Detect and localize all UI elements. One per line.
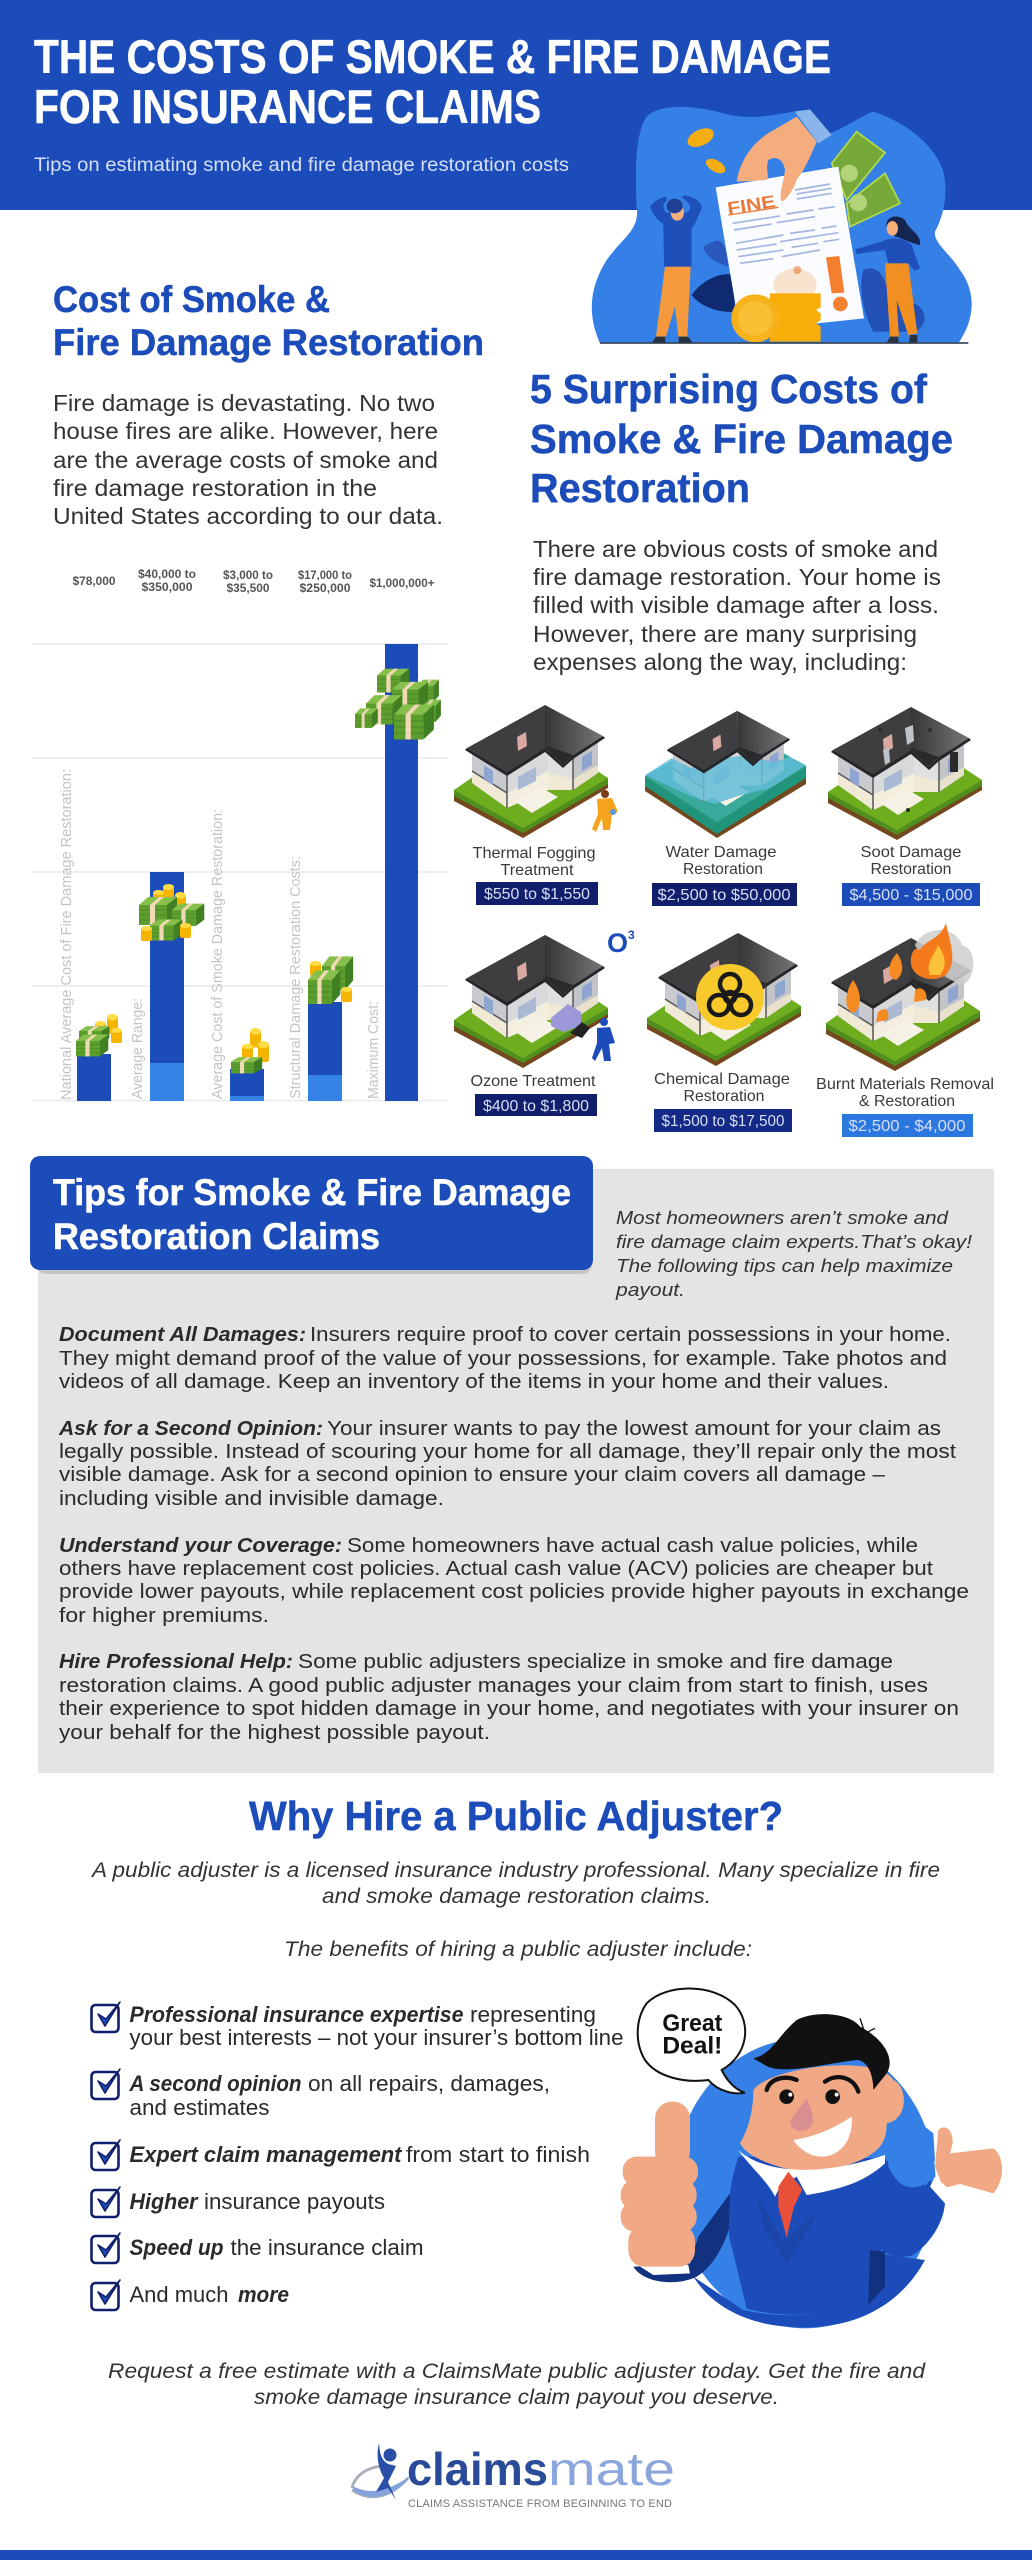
title: THE COSTS OF SMOKE & FIRE DAMAGE xyxy=(34,30,831,83)
label: & Restoration xyxy=(859,1093,955,1110)
icon: O3: O xyxy=(607,928,628,958)
benefit: higher payouts: Higher xyxy=(130,2189,199,2214)
card: chemical damage xyxy=(647,933,801,1132)
benefit: second opinion: A second opinion xyxy=(129,2071,302,2096)
tip: second opinion: including visible and invisible damage. xyxy=(59,1487,444,1510)
value labels: $1,000,000+ xyxy=(370,576,434,590)
intro paragraph: cost section xyxy=(53,390,443,529)
heading: cost of smoke and fire damage restoration xyxy=(53,279,484,363)
tip: second opinion: Your insurer wants to pay the lowest amount for your claim as xyxy=(327,1417,941,1440)
tip: hire professional help: Hire Professional Help: xyxy=(59,1650,293,1673)
rotated axis labels: Structural Damage Restoration Costs: xyxy=(287,856,304,1099)
panel heading: tips: Restoration Claims xyxy=(53,1216,380,1257)
label xyxy=(472,845,596,879)
subtitle: Tips on estimating smoke and fire damage restoration costs xyxy=(34,155,569,176)
card: soot damage xyxy=(828,707,982,906)
label: Thermal Fogging xyxy=(472,845,596,862)
benefit: speed up: Speed up xyxy=(130,2235,224,2260)
illustration: businessman thumbs up xyxy=(621,1989,1002,2328)
benefit: and much more: And much xyxy=(130,2282,228,2307)
label: Chemical Damage xyxy=(654,1071,790,1088)
intro paragraph: surprising costs: filled with visible damage after a loss. xyxy=(533,592,939,618)
tip: second opinion xyxy=(58,1417,956,1510)
money icon: bar 5 xyxy=(355,669,441,740)
speech bubble: Great xyxy=(662,2010,722,2037)
heading: 5 surprising costs: 5 Surprising Costs of xyxy=(530,366,927,412)
value labels: $350,000 xyxy=(142,580,193,594)
price tag: $2,500 to $50,000 xyxy=(658,887,791,904)
tip: second opinion: visible damage. Ask for a second opinion to ensure your claim covers all damage – xyxy=(59,1463,886,1486)
price tag: $550 to $1,550 xyxy=(484,886,590,903)
italic intro: tips: Most homeowners aren’t smoke and xyxy=(616,1207,949,1228)
rotated axis labels: Average Cost of Smoke Damage Restoration: xyxy=(209,809,226,1099)
price tag: $4,500 - $15,000 xyxy=(850,887,973,904)
label: Restoration xyxy=(683,861,763,878)
value labels: $40,000 to xyxy=(138,567,196,581)
intro paragraph: surprising costs: There are obvious costs of smoke and xyxy=(533,536,938,562)
tip: document all damages: videos of all damage. Keep an inventory of the items in your home and their values. xyxy=(59,1370,889,1393)
benefit: professional expertise xyxy=(92,2002,624,2050)
rotated axis labels: National Average Cost of Fire Damage Restoration: xyxy=(58,769,75,1100)
intro paragraph: cost section: Fire damage is devastating. No two xyxy=(53,390,435,416)
icon: flames xyxy=(846,923,952,1022)
icon: O3: 3 xyxy=(628,928,635,942)
speech bubble xyxy=(638,1989,745,2093)
tip: hire professional help: restoration claims. A good public adjuster manages your claim from start to finish, uses xyxy=(59,1674,928,1697)
tip: hire professional help xyxy=(59,1650,959,1744)
benefit: second opinion: and estimates xyxy=(130,2095,270,2120)
logo: claimsmate: mate xyxy=(548,2443,675,2495)
italic intro: tips: The following tips can help maximize xyxy=(616,1255,953,1276)
icon: worker in blue suit xyxy=(592,1018,615,1061)
label: Restoration xyxy=(684,1088,764,1105)
benefit: higher payouts: insurance payouts xyxy=(204,2189,385,2214)
title xyxy=(34,30,831,133)
intro paragraph: surprising costs xyxy=(533,536,941,675)
logo: claimsmate: CLAIMS ASSISTANCE FROM BEGINNING TO END xyxy=(408,2498,672,2510)
panel heading: tips: Tips for Smoke & Fire Damage xyxy=(53,1172,571,1213)
label xyxy=(654,1071,790,1105)
italic intro: tips: payout. xyxy=(615,1279,685,1300)
price tag: $2,500 - $4,000 xyxy=(848,1118,966,1135)
value labels: $78,000 xyxy=(72,574,116,588)
tip: hire professional help: Some public adjusters specialize in smoke and fire damage xyxy=(298,1650,893,1673)
value labels: $17,000 to xyxy=(298,568,352,582)
illustration: fine document with people xyxy=(592,107,972,343)
tip: understand your coverage xyxy=(59,1534,969,1627)
title: FOR INSURANCE CLAIMS xyxy=(34,80,541,133)
benefit: and much more xyxy=(92,2280,289,2310)
tip: second opinion: legally possible. Instead of scouring your home for all damage, they’ll repair only the most xyxy=(59,1440,956,1463)
tip: understand your coverage: others have replacement cost policies. Actual cash value (ACV) policies are cheaper but xyxy=(59,1557,933,1580)
benefit: expert claim management: from start to finish xyxy=(406,2142,590,2167)
benefit: professional expertise: representing xyxy=(470,2002,596,2027)
tip: document all damages: Insurers require proof to cover certain possessions in your home. xyxy=(310,1323,951,1346)
card: burnt materials xyxy=(816,923,994,1137)
benefit: professional expertise: your best interests – not your insurer’s bottom line xyxy=(130,2025,624,2050)
price tag xyxy=(475,1094,597,1116)
value labels xyxy=(72,567,434,595)
icon: ozone machine xyxy=(551,1004,590,1038)
intro paragraph: cost section: house fires are alike. However, here xyxy=(53,418,438,444)
label: Burnt Materials Removal xyxy=(816,1076,994,1093)
panel: tips background xyxy=(38,1169,994,1773)
footer band xyxy=(0,2550,1032,2560)
icon: logo figure xyxy=(352,2443,410,2500)
tip: hire professional help: your behalf for the highest possible payout. xyxy=(59,1721,490,1744)
price tag: $400 to $1,800 xyxy=(483,1098,589,1115)
bars xyxy=(77,644,418,1101)
label xyxy=(860,844,962,878)
header band xyxy=(0,0,1032,210)
label: Water Damage xyxy=(666,844,777,861)
value labels: $3,000 to xyxy=(223,568,273,582)
card: water damage xyxy=(645,711,806,906)
benefit: and much more: more xyxy=(238,2282,289,2307)
label: Ozone Treatment xyxy=(470,1073,596,1090)
heading: cost of smoke and fire damage restoration: Fire Damage Restoration xyxy=(53,322,484,363)
money icon: bar 4 xyxy=(308,956,353,1004)
intro paragraph: cost section: United States according to our data. xyxy=(53,503,443,529)
price tag xyxy=(476,882,598,905)
icon: worker in orange suit xyxy=(592,790,618,832)
money icon: bar 1 xyxy=(76,1014,122,1056)
tip: understand your coverage: Understand your Coverage: xyxy=(59,1534,342,1557)
intro paragraph: cost section: fire damage restoration in the xyxy=(53,475,377,501)
money icon: bar 2 xyxy=(139,884,204,941)
illustration: fine document with people: FINE xyxy=(726,191,777,218)
tip: understand your coverage: for higher premiums. xyxy=(59,1604,269,1627)
rotated axis labels: Maximum Cost: xyxy=(365,1001,382,1099)
logo: claimsmate xyxy=(352,2443,675,2510)
speech bubble: Deal! xyxy=(662,2032,722,2059)
heading: 5 surprising costs: Smoke & Fire Damage xyxy=(530,416,953,462)
intro: public adjuster: A public adjuster is a licensed insurance industry professional. Many specialize in fire xyxy=(90,1858,940,1882)
price tag xyxy=(654,1109,792,1132)
label xyxy=(666,844,777,878)
intro paragraph: surprising costs: expenses along the way, including: xyxy=(533,649,907,675)
tip: document all damages xyxy=(59,1323,951,1393)
tip: second opinion: Ask for a Second Opinion: xyxy=(58,1417,323,1440)
closing call to action xyxy=(108,2359,926,2409)
closing call to action: Request a free estimate with a ClaimsMate public adjuster today. Get the fire and xyxy=(108,2359,926,2383)
italic intro: tips xyxy=(615,1207,972,1300)
benefit: expert claim management xyxy=(92,2140,590,2170)
tip: document all damages: They might demand proof of the value of your possessions, for example. Take photos and xyxy=(59,1347,947,1370)
intro paragraph: cost section: are the average costs of smoke and xyxy=(53,447,438,473)
bar chart: restoration costs xyxy=(32,567,448,1101)
price tag xyxy=(842,883,980,906)
heading: 5 surprising costs: Restoration xyxy=(530,465,750,511)
heading: cost of smoke and fire damage restoration: Cost of Smoke & xyxy=(53,279,330,320)
label: Soot Damage xyxy=(860,844,962,861)
water overlay xyxy=(645,756,806,804)
closing call to action: smoke damage insurance claim payout you deserve. xyxy=(254,2385,779,2409)
intro: public adjuster xyxy=(90,1858,940,1961)
label: Treatment xyxy=(500,862,574,879)
label: Restoration xyxy=(870,861,952,878)
benefit: speed up: the insurance claim xyxy=(230,2235,424,2260)
italic intro: tips: fire damage claim experts.That’s okay! xyxy=(616,1231,972,1252)
intro: public adjuster: The benefits of hiring a public adjuster include: xyxy=(284,1937,752,1961)
price tag: $1,500 to $17,500 xyxy=(662,1113,785,1130)
benefit: higher payouts xyxy=(92,2187,385,2217)
smoke xyxy=(915,930,974,985)
tip: understand your coverage: Some homeowners have actual cash value policies, while xyxy=(347,1534,918,1557)
benefit: second opinion: on all repairs, damages, xyxy=(308,2071,550,2096)
rotated axis labels: Average Range: xyxy=(129,998,146,1099)
flooded ground xyxy=(645,725,806,838)
heading: 5 surprising costs xyxy=(530,366,953,511)
benefit: speed up xyxy=(92,2233,424,2263)
tip: understand your coverage: provide lower payouts, while replacement cost policies provide higher payouts in exchange xyxy=(59,1580,969,1603)
price tag xyxy=(652,883,797,906)
soot marks xyxy=(878,725,958,812)
panel heading: tips xyxy=(30,1156,593,1274)
intro paragraph: surprising costs: fire damage restoration. Your home is xyxy=(533,564,941,590)
card: ozone treatment xyxy=(454,928,635,1116)
tip: hire professional help: their experience to spot hidden damage in your home, and negotiates with your insurer on xyxy=(59,1697,959,1720)
benefit: second opinion xyxy=(92,2069,550,2120)
heading: why hire a public adjuster: Why Hire a Public Adjuster? xyxy=(249,1793,783,1839)
value labels: $35,500 xyxy=(226,581,270,595)
benefit: expert claim management: Expert claim management xyxy=(130,2142,403,2167)
intro paragraph: surprising costs: However, there are many surprising xyxy=(533,621,917,647)
label xyxy=(816,1076,994,1110)
rotated axis labels xyxy=(58,769,382,1100)
money icon: bar 3 xyxy=(231,1028,269,1073)
tip: document all damages: Document All Damages: xyxy=(59,1323,306,1346)
logo: claimsmate: claims xyxy=(407,2443,548,2495)
intro: public adjuster: and smoke damage restoration claims. xyxy=(322,1884,711,1908)
benefit: professional expertise: Professional insurance expertise xyxy=(130,2002,464,2027)
price tag xyxy=(842,1114,973,1137)
value labels: $250,000 xyxy=(300,581,351,595)
icon: biohazard sign xyxy=(696,964,764,1030)
card: thermal fogging xyxy=(454,705,618,905)
